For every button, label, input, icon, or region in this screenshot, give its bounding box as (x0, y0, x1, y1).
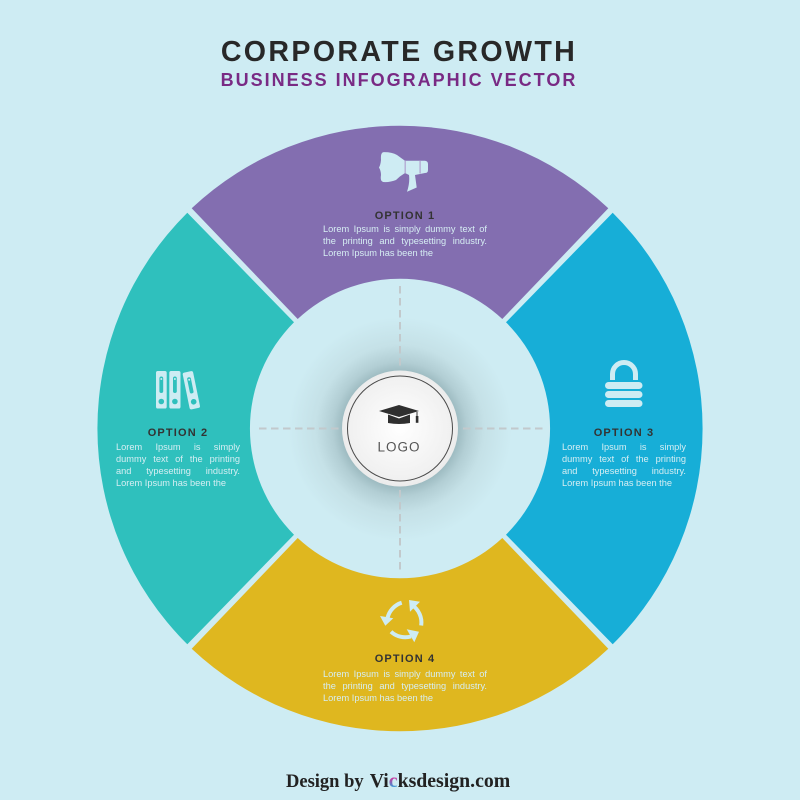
icon: padlock (605, 362, 642, 407)
logo text: LOGO (377, 439, 421, 454)
text block: option 2: and typesetting industry. (116, 466, 240, 476)
text block: option 3: dummy text of the printing (562, 454, 686, 464)
dashed cross lines (259, 286, 545, 571)
logo badge (342, 370, 458, 486)
icon: cycle arrows (380, 600, 421, 642)
text block: option 1: Lorem Ipsum is simply dummy text of (323, 224, 487, 234)
title: CORPORATE GROWTH (221, 36, 577, 68)
icon: graduation cap (379, 405, 419, 424)
panel: option 2 teal segment (97, 213, 294, 644)
text block: option 1: Lorem Ipsum has been the (323, 248, 433, 258)
heading: option 4: OPTION 4 (375, 653, 435, 665)
icon: binders (156, 371, 200, 410)
text block: option 2: dummy text of the printing (116, 454, 240, 464)
text block: option 1: the printing and typesetting industry. (323, 236, 487, 246)
text block: option 3: and typesetting industry. (562, 466, 686, 476)
icon: megaphone (379, 152, 428, 192)
text block: option 2 (116, 442, 240, 488)
text block: option 3: Lorem Ipsum has been the (562, 478, 672, 488)
panel: option 1 purple segment (192, 126, 608, 319)
text block: option 3: Lorem Ipsum is simply (562, 442, 686, 452)
panel: option 4 yellow segment (192, 538, 608, 731)
text block: option 4: Lorem Ipsum has been the (323, 693, 433, 703)
text block: option 1 (323, 224, 487, 258)
footer credit: Design by Vicksdesign.com (286, 770, 511, 792)
heading: option 2: OPTION 2 (148, 427, 208, 439)
text block: option 3 (562, 442, 686, 488)
text block: option 2: Lorem Ipsum is simply (116, 442, 240, 452)
text block: option 4 (323, 669, 487, 703)
subtitle: BUSINESS INFOGRAPHIC VECTOR (221, 70, 577, 90)
text block: option 2: Lorem Ipsum has been the (116, 478, 226, 488)
heading: option 3: OPTION 3 (594, 427, 654, 439)
panel: option 3 blue segment (506, 213, 703, 644)
text block: option 4: the printing and typesetting industry. (323, 681, 487, 691)
center shadow (288, 317, 512, 541)
heading: option 1: OPTION 1 (375, 210, 435, 222)
text block: option 4: Lorem Ipsum is simply dummy text of (323, 669, 487, 679)
